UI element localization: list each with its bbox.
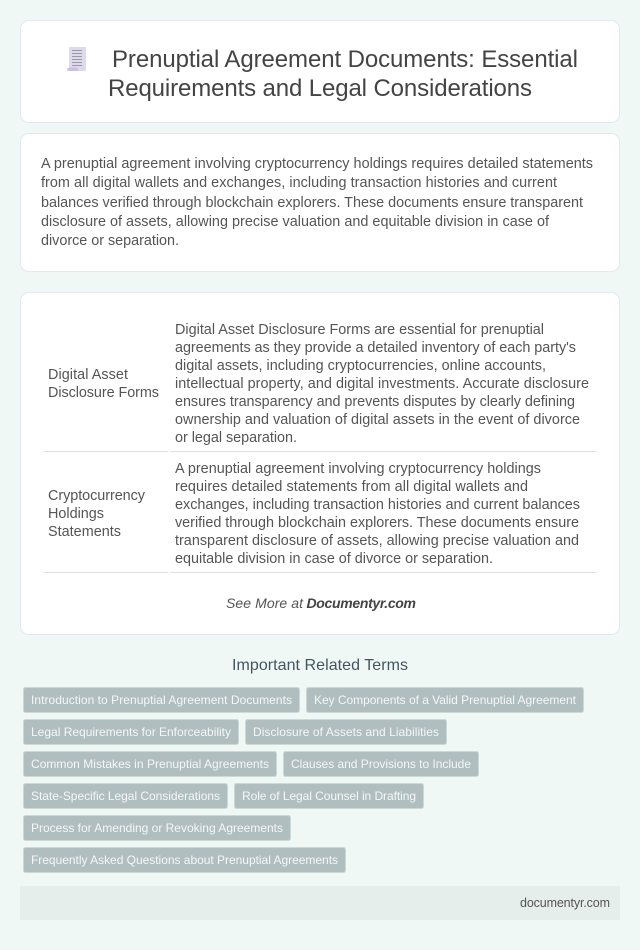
panel: introduction [20, 134, 620, 272]
row description: cryptocurrency holdings statements: verified through blockchain explorers. These documents ensure [175, 515, 579, 531]
table row: digital asset disclosure forms [48, 322, 589, 446]
heading: important related terms: Important Related Terms [232, 657, 408, 674]
tag: Key Components of a Valid Prenuptial Agreement [314, 693, 577, 707]
tag [246, 720, 446, 744]
tag [284, 752, 478, 776]
row label: cryptocurrency holdings statements [48, 488, 146, 540]
icon: document scroll [67, 47, 86, 71]
tag [24, 816, 290, 840]
related terms tags [24, 688, 584, 872]
tag [24, 848, 346, 872]
tag [234, 784, 424, 808]
tag: State-Specific Legal Considerations [31, 789, 220, 803]
footer: documentyr.com [520, 896, 610, 910]
tag: Introduction to Prenuptial Agreement Documents [31, 693, 292, 707]
see more link: See More at [226, 595, 304, 611]
text block: introduction: balances verified through blockchain explorers. These documents ensure transparent [41, 195, 583, 211]
row description: digital asset disclosure forms: Digital Asset Disclosure Forms are essential for prenuptial [175, 322, 544, 338]
tag: Frequently Asked Questions about Prenuptial Agreements [31, 853, 338, 867]
row label: digital asset disclosure forms: Digital Asset [48, 367, 128, 383]
tag [24, 752, 276, 776]
row description: digital asset disclosure forms: or legal separation. [175, 430, 297, 446]
text block: introduction [41, 156, 593, 249]
text block: introduction: divorce or separation. [41, 233, 179, 249]
tag: Role of Legal Counsel in Drafting [242, 789, 416, 803]
row description: digital asset disclosure forms: digital assets, including cryptocurrencies, online accounts, [175, 358, 546, 374]
tag: Legal Requirements for Enforceability [31, 725, 231, 739]
row description: cryptocurrency holdings statements: requires detailed statements from all digital wallets and [175, 479, 528, 495]
tag [24, 720, 238, 744]
row description: cryptocurrency holdings statements: transparent disclosure of assets, allowing precise valuation and [175, 533, 579, 549]
title: Prenuptial Agreement Documents: Essential [112, 46, 578, 73]
row label: digital asset disclosure forms: Disclosure Forms [48, 385, 159, 401]
text block: introduction: A prenuptial agreement involving cryptocurrency holdings requires detailed statements [41, 156, 593, 172]
row label: cryptocurrency holdings statements: Statements [48, 524, 121, 540]
title [108, 46, 578, 102]
tag: Common Mistakes in Prenuptial Agreements [31, 757, 269, 771]
row description: digital asset disclosure forms: ensures transparency and prevents disputes by clearly defining [175, 394, 575, 410]
tag [306, 688, 584, 712]
row description: digital asset disclosure forms: ownership and valuation of digital assets in the event of divorce [175, 412, 580, 428]
tag [24, 688, 300, 712]
row label: digital asset disclosure forms [48, 367, 159, 401]
tag: Clauses and Provisions to Include [291, 757, 471, 771]
table row: cryptocurrency holdings statements [48, 461, 580, 567]
tag [24, 784, 228, 808]
row label: cryptocurrency holdings statements: Cryptocurrency [48, 488, 146, 504]
panel: header [20, 20, 620, 122]
footer [20, 886, 620, 920]
row description: digital asset disclosure forms: intellectual property, and digital investments. Accurate disclosure [175, 376, 589, 392]
row label: cryptocurrency holdings statements: Holdings [48, 506, 104, 522]
row description: cryptocurrency holdings statements [175, 461, 580, 567]
row description: digital asset disclosure forms [175, 322, 589, 446]
title: Requirements and Legal Considerations [108, 75, 532, 102]
see more link [226, 595, 416, 611]
tag: Process for Amending or Revoking Agreements [31, 821, 283, 835]
row description: cryptocurrency holdings statements: equitable division in case of divorce or separation. [175, 551, 493, 567]
row description: digital asset disclosure forms: agreements as they provide a detailed inventory of each party's [175, 340, 576, 356]
row description: cryptocurrency holdings statements: exchanges, including transaction histories and current balances [175, 497, 580, 513]
text block: introduction: disclosure of assets, allowing precise valuation and equitable division in case of [41, 214, 550, 230]
panel: document table [20, 292, 620, 634]
tag: Disclosure of Assets and Liabilities [253, 725, 439, 739]
see more link: Documentyr.com [306, 595, 416, 611]
row description: cryptocurrency holdings statements: A prenuptial agreement involving cryptocurrency holdings [175, 461, 541, 477]
text block: introduction: from all digital wallets and exchanges, including transaction histories and current [41, 175, 557, 191]
